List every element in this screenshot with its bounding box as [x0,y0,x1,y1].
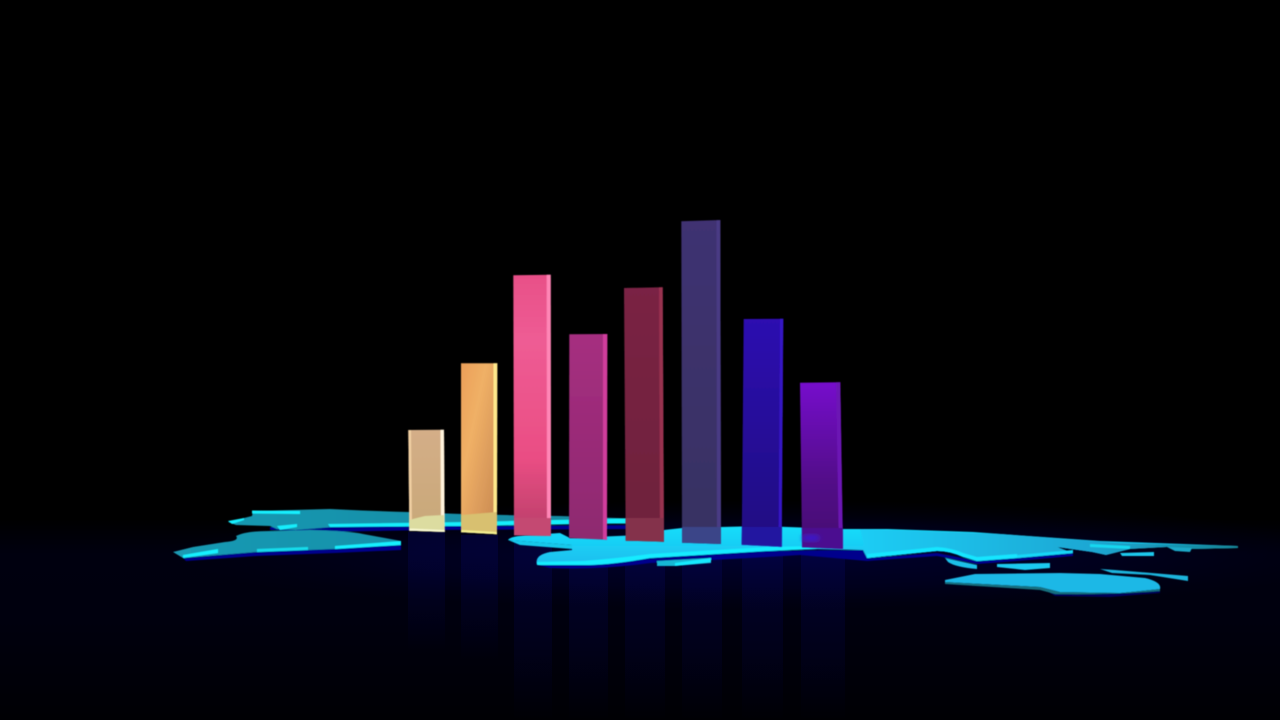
north-west landmass [228,509,644,530]
bar 4: magenta [569,334,607,540]
australia [945,569,1188,594]
bar chart [408,220,843,549]
bar 5: maroon [624,287,664,542]
bar 2: orange [461,363,497,534]
bar 8: violet [800,382,843,549]
bar 7: blue [742,319,783,547]
bar 6: indigo-grey [681,220,721,544]
central landmass [508,526,1238,565]
south-west landmass [173,530,401,558]
map shadow [183,525,1160,597]
bar 3: pink [513,275,551,536]
floor glow [160,500,1280,610]
bar reflections [408,532,845,720]
world map [173,509,1238,597]
islands [657,547,1192,570]
bar 1: cream [408,430,445,532]
